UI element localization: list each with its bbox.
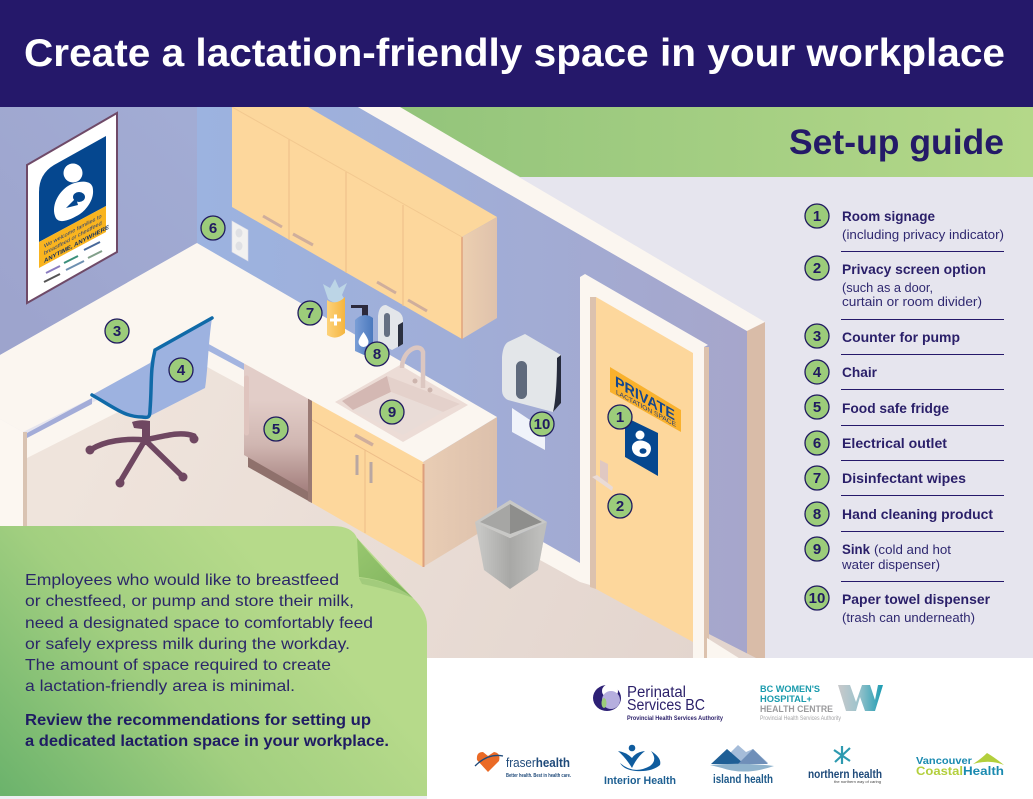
note body text: The amount of space required to create <box>25 657 331 674</box>
logo: Fraser Health: Better health. Best in health care. <box>506 773 571 779</box>
blue strip under counter <box>27 398 92 438</box>
chair <box>86 318 212 488</box>
sink <box>335 348 468 442</box>
legend item 4: 4 <box>813 364 822 381</box>
note call to action <box>25 712 389 750</box>
icon: disinfectant wipes <box>323 279 347 338</box>
logo: Northern Health <box>808 746 882 784</box>
fridge <box>244 360 312 503</box>
left wall <box>0 107 197 355</box>
legend item 2: curtain or room divider) <box>842 294 982 309</box>
legend item 9: (cold and hot <box>874 542 951 557</box>
legend item 1: 1 <box>813 208 821 225</box>
legend item 1: (including privacy indicator) <box>842 227 1004 242</box>
legend item 2: 2 <box>813 260 821 277</box>
logo: Island Health <box>710 745 774 786</box>
baseboard left of door <box>540 542 580 582</box>
logo: BC Women's Hospital: HOSPITAL+ <box>760 694 812 705</box>
marker 4: 4 <box>177 362 186 379</box>
logo strip background <box>427 658 1033 799</box>
legend item 6 <box>805 431 947 455</box>
banner: set-up guide <box>398 107 1033 177</box>
legend item 8: Hand cleaning product <box>842 506 993 522</box>
poster <box>27 113 117 303</box>
note call to action: Review the recommendations for setting up <box>25 712 371 729</box>
logo: Northern Health: the northern way of caring <box>834 779 881 784</box>
legend <box>805 204 1004 625</box>
icon: hand sanitizer dispenser <box>378 305 403 350</box>
legend item 1 <box>805 204 1004 242</box>
logo: Fraser Health <box>475 752 571 779</box>
illustration: lactation room <box>0 107 765 660</box>
door sign: nursing symbol <box>625 417 658 476</box>
waste bin <box>475 500 547 589</box>
marker 1: 1 <box>616 409 624 426</box>
marker 2 <box>608 494 632 518</box>
wall top edge <box>358 107 765 331</box>
legend item 10: Paper towel dispenser <box>842 591 991 607</box>
legend item 8 <box>805 502 993 526</box>
legend item 5: 5 <box>813 399 821 416</box>
marker 3 <box>105 319 129 343</box>
banner: set-up guide: Set-up guide <box>789 123 1004 162</box>
marker 10: 10 <box>534 416 550 433</box>
poster: We welcome families to <box>44 213 102 250</box>
marker 1 <box>608 405 632 429</box>
logo: Fraser Health: fraserhealth <box>506 755 570 770</box>
logo: Interior Health <box>604 745 676 787</box>
legend item 9 <box>805 537 951 572</box>
title: Create a lactation-friendly space in your workplace <box>24 32 1005 75</box>
door sign: private lactation space: PRIVATE <box>615 373 675 425</box>
marker 5 <box>264 417 288 441</box>
legend item 7 <box>805 466 966 490</box>
logo: BC Women's Hospital: Provincial Health Services Authority <box>760 716 841 722</box>
note body text <box>25 572 373 695</box>
upper cabinets <box>232 107 497 339</box>
note panel <box>0 526 427 799</box>
back wall <box>196 107 747 660</box>
legend item 6: Electrical outlet <box>842 435 947 451</box>
logo: Northern Health: northern health <box>808 769 882 781</box>
note call to action: a dedicated lactation space in your workplace. <box>25 733 389 750</box>
icon: electrical outlet <box>232 221 248 261</box>
marker 7 <box>298 301 322 325</box>
wall end <box>747 322 765 660</box>
legend item 4 <box>805 360 878 384</box>
baseboard under counter <box>27 344 246 458</box>
legend item 7: 7 <box>813 470 821 487</box>
marker 5: 5 <box>272 421 280 438</box>
logo: Vancouver Coastal Health: Coastal <box>916 764 963 778</box>
marker 6: 6 <box>209 220 217 237</box>
door <box>580 274 709 660</box>
door handle <box>592 460 613 491</box>
legend item 9: water dispenser) <box>841 557 940 572</box>
note body text: Employees who would like to breastfeed <box>25 572 339 589</box>
marker 4 <box>169 358 193 382</box>
marker 7: 7 <box>306 305 314 322</box>
legend item 9: 9 <box>813 541 821 558</box>
legend item 3: Counter for pump <box>842 329 960 345</box>
blue strip right of chair <box>205 341 246 371</box>
marker 10 <box>530 412 554 436</box>
legend item 6: 6 <box>813 435 821 452</box>
logo: BC Women's Hospital: HEALTH CENTRE <box>760 704 833 715</box>
legend item 5: Food safe fridge <box>842 400 949 416</box>
counter top <box>0 243 497 462</box>
baseboard right of door <box>707 638 742 660</box>
header <box>0 0 1033 107</box>
legend item 4: Chair <box>842 364 878 380</box>
logo: Perinatal Services BC: Perinatal <box>627 684 686 701</box>
marker 8 <box>365 342 389 366</box>
marker 9: 9 <box>388 404 396 421</box>
poster: breastfeed or chestfeed <box>44 221 102 257</box>
note body text: need a designated space to comfortably feed <box>25 615 373 632</box>
note body text: a lactation-friendly area is minimal. <box>25 678 295 695</box>
marker 6 <box>201 216 225 240</box>
marker 9 <box>380 400 404 424</box>
logo: Vancouver Coastal Health <box>916 753 1004 778</box>
door sign: private lactation space: LACTATION SPACE <box>616 389 676 429</box>
marker 8: 8 <box>373 346 381 363</box>
marker 2: 2 <box>616 498 624 515</box>
logo: Vancouver Coastal Health: Health <box>963 764 1004 778</box>
legend item 10 <box>805 586 991 625</box>
legend item 3: 3 <box>813 328 821 345</box>
legend item 3 <box>805 324 960 348</box>
logo: BC Women's Hospital: BC WOMEN'S <box>760 684 820 695</box>
legend item 1: Room signage <box>842 208 935 224</box>
legend item 7: Disinfectant wipes <box>842 470 966 486</box>
logo: Perinatal Services BC: Provincial Health Services Authority <box>627 715 723 722</box>
floor <box>0 367 760 660</box>
paper towel dispenser <box>502 334 561 450</box>
logo: Vancouver Coastal Health: Vancouver <box>916 755 972 767</box>
icon: soap bottle <box>351 305 373 355</box>
logo: Island Health: island health <box>713 774 773 786</box>
note body text: or chestfeed, or pump and store their milk, <box>25 593 354 610</box>
counter end panel <box>0 419 27 530</box>
legend item 2 <box>805 256 986 309</box>
lower cabinet <box>312 398 497 567</box>
marker 3: 3 <box>113 323 121 340</box>
legend item 10: 10 <box>809 590 825 607</box>
legend item 10: (trash can underneath) <box>842 610 975 625</box>
legend item 8: 8 <box>813 506 821 523</box>
legend item 5 <box>805 395 949 419</box>
logo: BC Women's Hospital <box>760 684 883 722</box>
logo: Interior Health: Interior Health <box>604 775 676 787</box>
logo: Perinatal Services BC <box>593 684 723 722</box>
logo: Perinatal Services BC: Services BC <box>627 697 705 714</box>
note body text: or safely express milk during the workday. <box>25 636 350 653</box>
legend item 2: (such as a door, <box>842 280 933 295</box>
legend item 2: Privacy screen option <box>842 261 986 277</box>
legend item 9: Sink <box>842 541 870 557</box>
poster: ANYTIME, ANYWHERE <box>44 224 110 265</box>
